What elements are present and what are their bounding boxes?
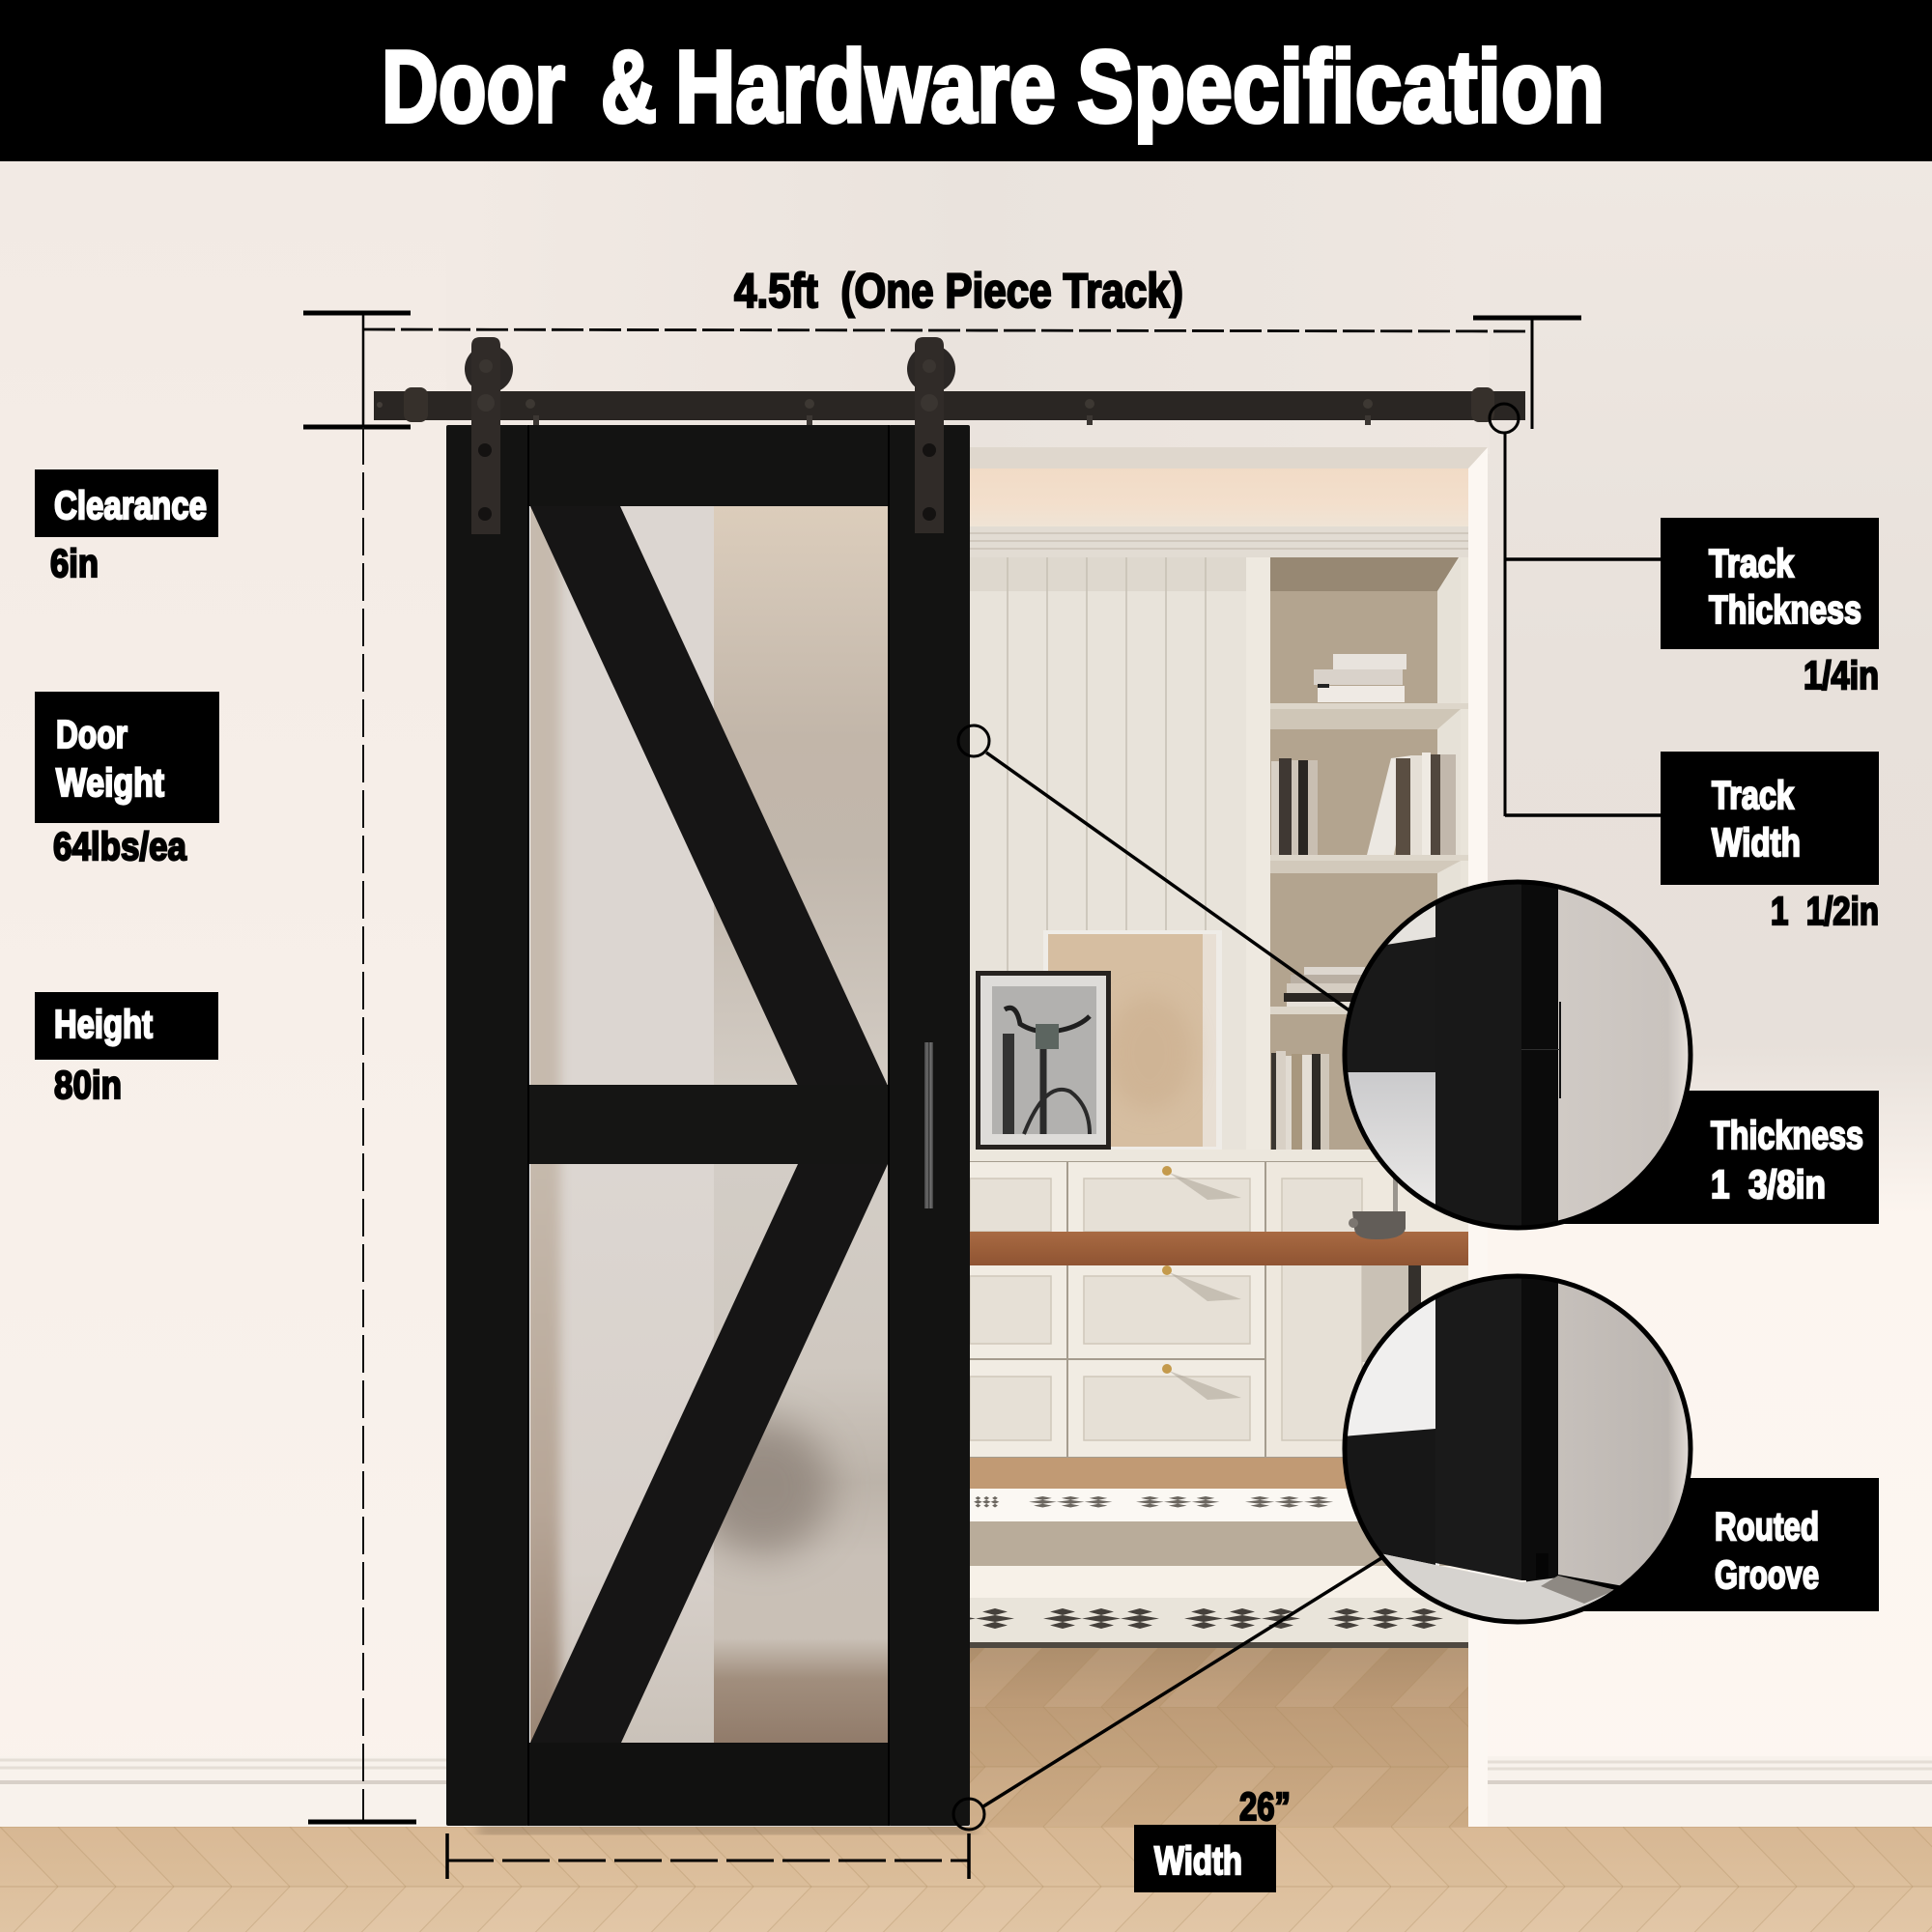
label: thickness: 1 3/8in <box>1711 1162 1826 1207</box>
label: track width <box>1661 752 1879 885</box>
value: width: 26” <box>1239 1784 1291 1829</box>
label: height: Height <box>54 1002 153 1046</box>
baseboard left <box>0 1756 446 1827</box>
title bar <box>0 0 1932 161</box>
value: track width: 1 1/2in <box>1771 889 1879 933</box>
rug <box>970 1489 1468 1648</box>
magnifier: routed groove detail <box>1343 1273 1695 1625</box>
wood floor <box>0 1826 1932 1932</box>
room seen through doorway <box>970 469 1468 1827</box>
label: track thickness: Track <box>1709 541 1794 585</box>
label: routed groove: Groove <box>1715 1552 1819 1597</box>
lower diagonal brace <box>530 1164 888 1743</box>
label: track thickness: Thickness <box>1709 587 1861 632</box>
value: track thickness: 1/4in <box>1804 653 1879 697</box>
label: height <box>35 992 218 1060</box>
value: door weight: 64lbs/ea <box>53 824 187 868</box>
middle rail <box>528 1085 889 1164</box>
barn door <box>446 425 970 1826</box>
title bar: Specification <box>1077 30 1605 144</box>
books: lower shelf <box>1271 1051 1329 1150</box>
crown moulding <box>970 526 1468 557</box>
clearance dimension <box>303 313 411 427</box>
right stile <box>889 425 970 1826</box>
upper diagonal brace <box>530 506 888 1086</box>
label: clearance: Clearance <box>54 483 207 527</box>
width dimension <box>446 1833 969 1879</box>
label: track thickness <box>1661 518 1879 649</box>
top rail <box>528 425 889 506</box>
door handle <box>924 1042 933 1208</box>
room floor <box>970 1458 1468 1827</box>
title bar: Hardware <box>675 30 1056 144</box>
label: routed groove <box>1526 1478 1879 1611</box>
framed bicycle photo <box>976 971 1111 1150</box>
height dimension <box>308 427 416 1822</box>
label: width <box>1134 1825 1276 1892</box>
framed watercolour art <box>1043 930 1222 1150</box>
hanger left <box>465 337 513 534</box>
hanger right <box>907 337 955 533</box>
panelled wall <box>970 557 1275 1161</box>
label: track width: Width <box>1712 820 1801 865</box>
door jamb right <box>970 447 1932 1827</box>
label: door weight <box>35 692 219 823</box>
title bar: Door <box>382 30 565 144</box>
magnifier: door thickness detail <box>1343 879 1695 1231</box>
frosted glass upper <box>522 493 888 1101</box>
wood table top <box>970 1232 1468 1265</box>
title bar: & <box>601 30 657 144</box>
value: clearance: 6in <box>50 541 99 585</box>
books: second shelf right <box>1367 753 1456 855</box>
left stile <box>446 425 528 1826</box>
books: top shelf stack <box>1314 654 1406 702</box>
label: door weight: Door <box>56 712 128 756</box>
callout lines: track thickness and width <box>1490 404 1661 816</box>
track length value: 4.5ft (One Piece Track) <box>734 264 1183 318</box>
label: track width: Track <box>1712 773 1794 817</box>
frosted glass lower <box>522 1150 888 1758</box>
callout marker: routed groove <box>953 1558 1381 1830</box>
bottom rail <box>528 1743 889 1826</box>
track rail <box>374 387 1525 425</box>
brass knobs <box>1162 1166 1241 1400</box>
books: third shelf stack <box>1284 967 1365 1007</box>
callout marker: door thickness <box>958 725 1350 1011</box>
label: thickness <box>1526 1091 1879 1224</box>
label: width: Width <box>1154 1838 1242 1883</box>
label: clearance <box>35 469 218 537</box>
value: height: 80in <box>54 1063 122 1107</box>
track length dimension <box>363 318 1581 429</box>
bookshelf <box>1270 557 1468 1161</box>
books: second shelf left <box>1271 758 1318 855</box>
label: routed groove: Routed <box>1715 1504 1819 1548</box>
grey bowl <box>1349 1179 1406 1239</box>
label: thickness: Thickness <box>1711 1113 1863 1157</box>
base cabinets <box>970 1150 1468 1458</box>
label: door weight: Weight <box>56 760 164 805</box>
